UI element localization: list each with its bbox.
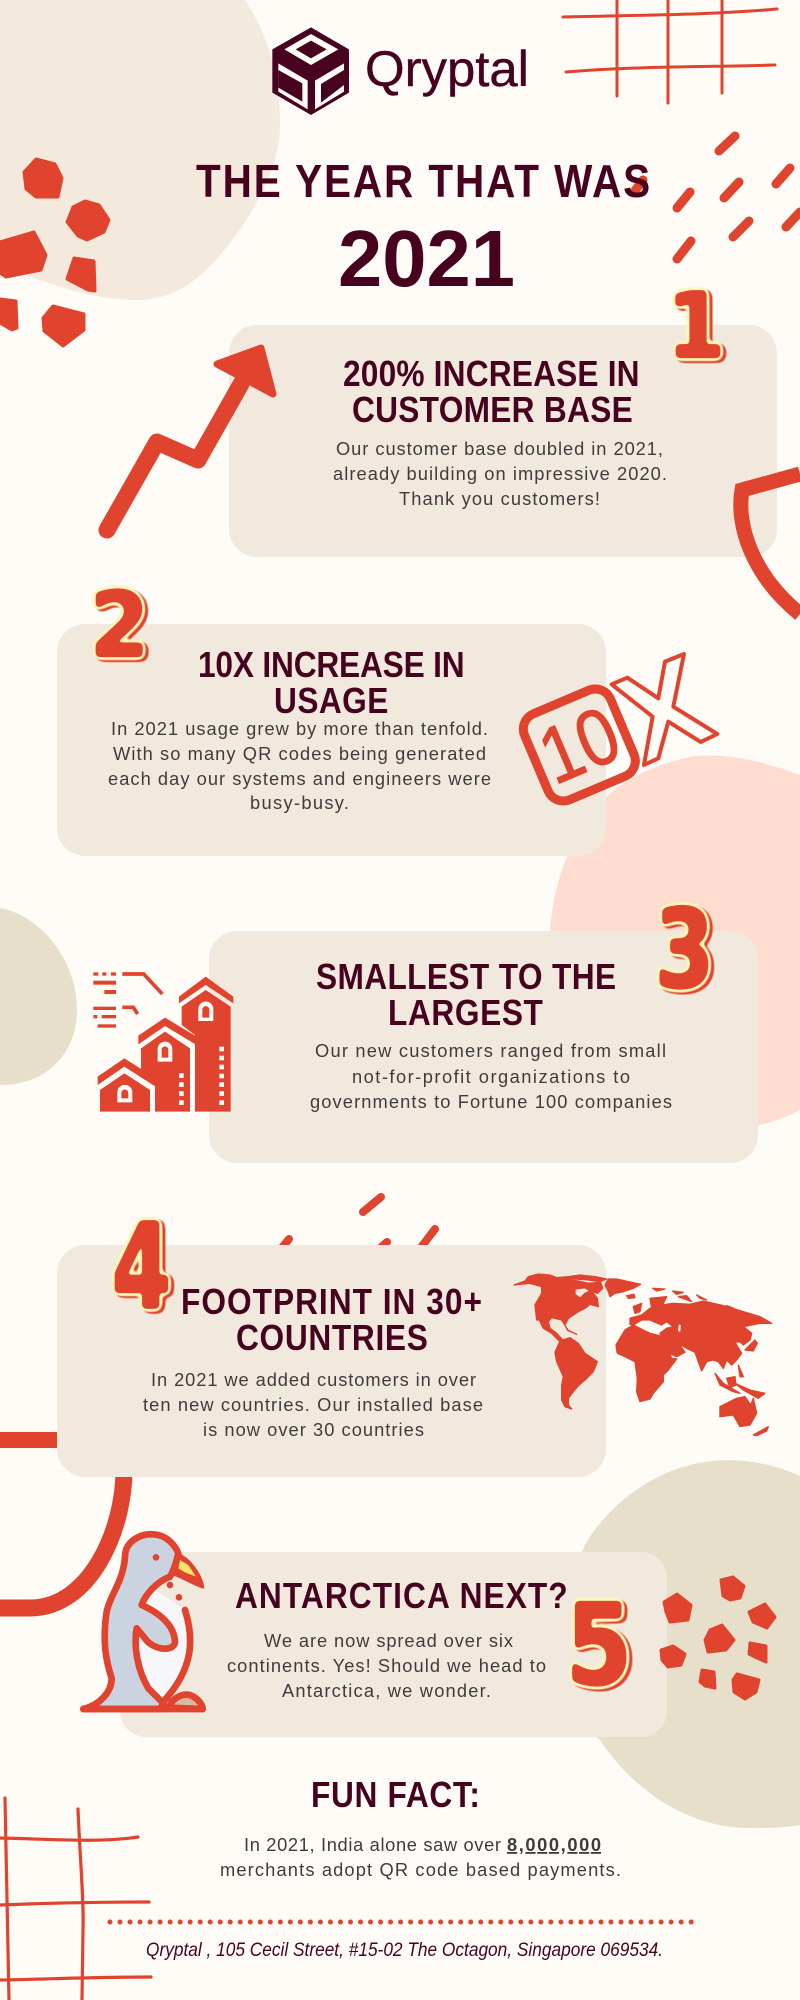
body 5: We are now spread over six (264, 1630, 513, 1651)
body 3: Our new customers ranged from small (315, 1040, 666, 1061)
heading 3 (316, 957, 616, 1033)
body 1: already building on impressive 2020. (333, 463, 667, 484)
icon: logo cube (272, 27, 349, 115)
title: THE YEAR THAT WAS (196, 157, 650, 208)
heading 3: SMALLEST TO THE (316, 957, 616, 997)
heading 4: FOOTPRINT IN 30+ (181, 1282, 482, 1322)
panel 5: Antarctica (120, 1552, 667, 1737)
icon: growth arrow (107, 348, 273, 530)
body 2: each day our systems and engineers were (108, 768, 491, 789)
body 2 (108, 718, 491, 813)
icon: 10X (518, 654, 717, 806)
icon: penguin (83, 1534, 203, 1709)
decorative grid: top right (563, 0, 777, 103)
body 3: not-for-profit organizations to (352, 1066, 630, 1087)
heading 5: ANTARCTICA NEXT? (235, 1576, 568, 1616)
heading 1: CUSTOMER BASE (352, 390, 633, 430)
body 4: ten new countries. Our installed base (143, 1394, 483, 1415)
heading 1 (343, 354, 640, 430)
body 1 (333, 438, 667, 509)
decorative red curve (0, 1440, 124, 1608)
panel 2: usage (57, 624, 606, 856)
decorative red hook (741, 474, 800, 614)
number 1: 1 (667, 274, 725, 379)
panel 4: footprint (57, 1245, 606, 1477)
heading 2 (198, 645, 465, 721)
decorative rocks: top left (0, 159, 109, 346)
heading 3: LARGEST (388, 993, 543, 1033)
body 2: busy-busy. (250, 792, 349, 813)
body 4: is now over 30 countries (203, 1419, 424, 1440)
number 4: 4 (112, 1199, 171, 1337)
decorative dashes: top right (634, 136, 800, 259)
decorative dashes above panel 4 (280, 1197, 435, 1250)
body 2: With so many QR codes being generated (113, 743, 486, 764)
fun fact body: merchants adopt QR code based payments. (220, 1859, 621, 1880)
number 3: 3 (655, 886, 714, 1013)
heading 4 (181, 1282, 482, 1358)
number 5: 5 (566, 1581, 632, 1711)
fun fact body: 8,000,000 (507, 1834, 601, 1855)
decorative grid: bottom left (0, 1798, 151, 2000)
body 5 (227, 1630, 546, 1701)
heading 4: COUNTRIES (236, 1318, 428, 1358)
body 1: Our customer base doubled in 2021, (336, 438, 663, 459)
fun fact body: In 2021, India alone saw over (244, 1834, 501, 1855)
heading 2: USAGE (274, 681, 388, 721)
title (196, 157, 650, 303)
body 5: Antarctica, we wonder. (282, 1680, 491, 1701)
heading 1: 200% INCREASE IN (343, 354, 640, 394)
icon: buildings (93, 972, 233, 1112)
body 4: In 2021 we added customers in over (151, 1369, 476, 1390)
body 1: Thank you customers! (399, 488, 600, 509)
number 2: 2 (90, 573, 149, 677)
footer address: Qryptal , 105 Cecil Street, #15-02 The Octagon, Singapore 069534. (146, 1940, 663, 1961)
fun fact (220, 1775, 621, 1880)
panel 3: customers range (209, 931, 758, 1163)
body 3: governments to Fortune 100 companies (310, 1091, 672, 1112)
heading 2: 10X INCREASE IN (198, 645, 465, 685)
body 5: continents. Yes! Should we head to (227, 1655, 546, 1676)
icon: 10X: 10 (526, 689, 632, 801)
body 2: In 2021 usage grew by more than tenfold. (111, 718, 488, 739)
body 4 (143, 1369, 483, 1440)
fun fact: FUN FACT: (311, 1775, 480, 1815)
fun fact body (220, 1834, 621, 1880)
decorative rocks: right (661, 1577, 775, 1699)
body 3 (310, 1040, 672, 1112)
title year: 2021 (338, 214, 515, 303)
panel 1: customer base (229, 325, 777, 557)
logo wordmark: Qryptal (365, 41, 529, 97)
icon: world map (514, 1274, 772, 1436)
logo: Qryptal (272, 27, 529, 115)
